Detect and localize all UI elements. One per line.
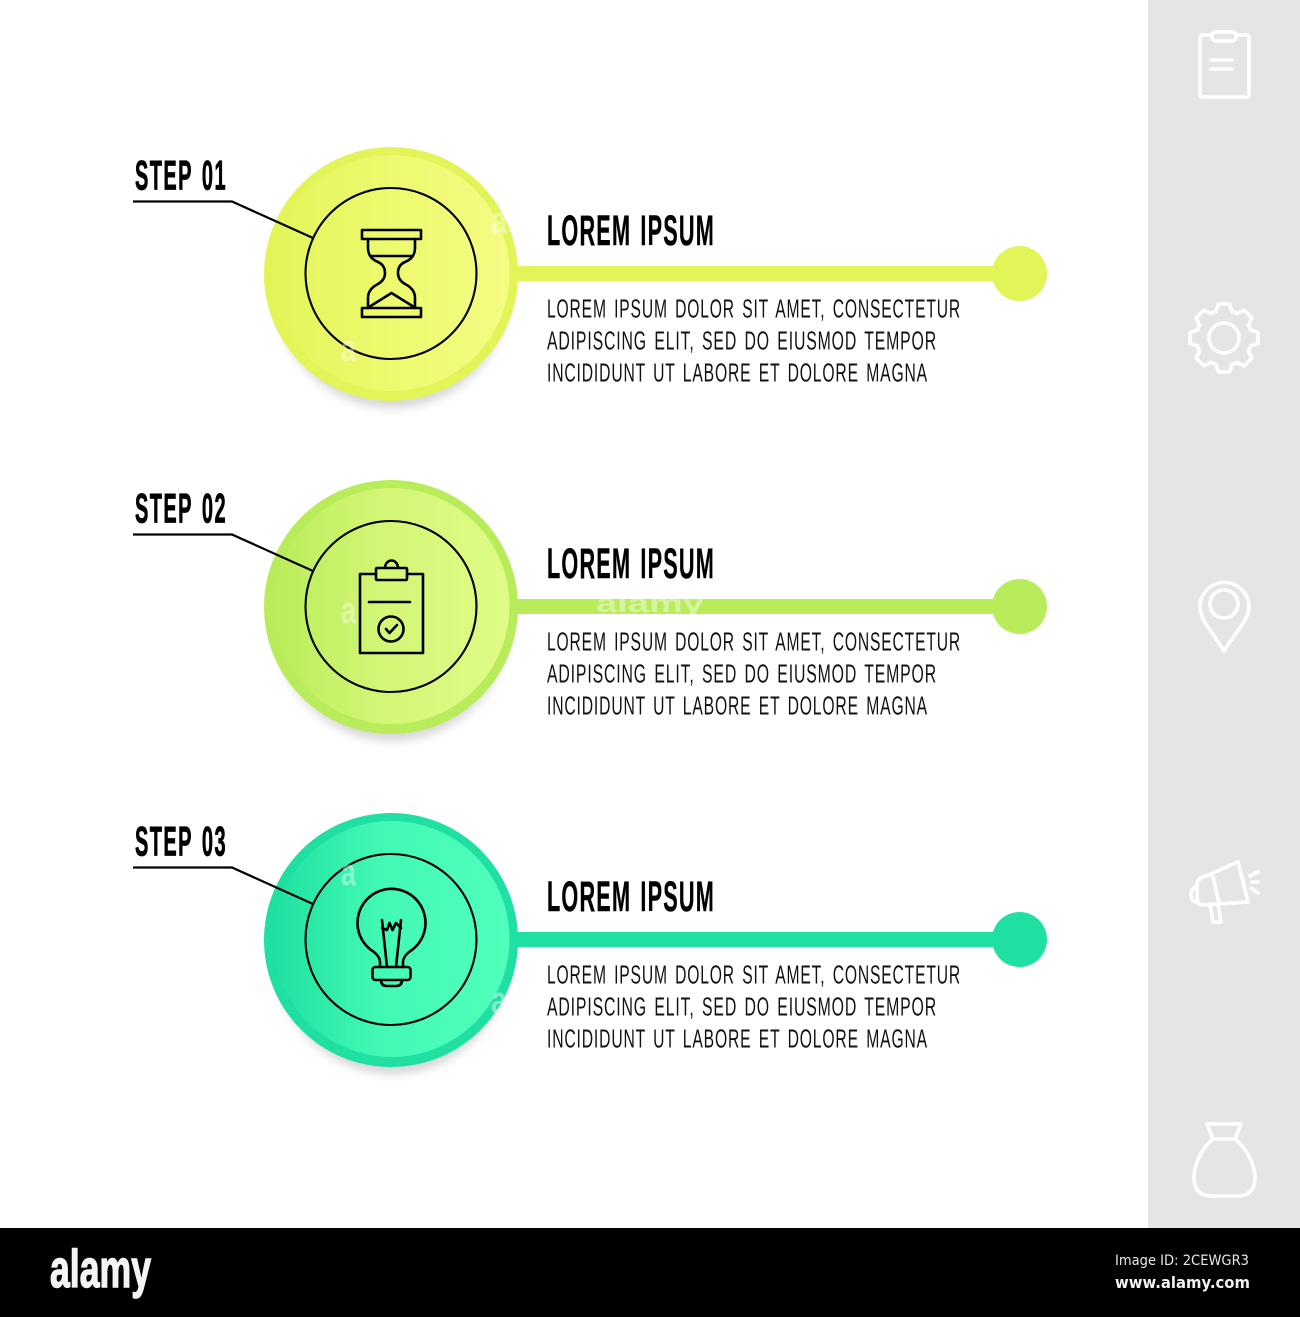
body text: LOREM IPSUM DOLOR SIT AMET, CONSECTETUR: [547, 960, 961, 990]
leader line: [133, 534, 313, 571]
icon: sidebar map pin: [1200, 582, 1249, 651]
panel: step 2: [133, 480, 1047, 741]
icon: sidebar gear: [1190, 304, 1258, 372]
panel: step 1: [133, 147, 1047, 408]
body text: [547, 960, 961, 1054]
body text: LOREM IPSUM DOLOR SIT AMET, CONSECTETUR: [547, 626, 961, 656]
panel: step 2: STEP 02: [135, 484, 227, 532]
heading: LOREM IPSUM: [547, 207, 715, 255]
site url: www.alamy.com: [1115, 1273, 1250, 1292]
body text: ADIPISCING ELIT, SED DO EIUSMOD TEMPOR: [547, 658, 937, 688]
footer bar: [0, 1228, 1300, 1317]
watermark marks: alamy: [596, 588, 705, 618]
body text: LOREM IPSUM DOLOR SIT AMET, CONSECTETUR: [547, 294, 961, 324]
body text: [547, 626, 961, 720]
panel: step 1: STEP 01: [135, 152, 227, 198]
icon: hourglass: [362, 230, 421, 317]
body text: INCIDIDUNT UT LABORE ET DOLORE MAGNA: [547, 690, 928, 720]
body text: INCIDIDUNT UT LABORE ET DOLORE MAGNA: [547, 1024, 928, 1054]
heading: LOREM IPSUM: [547, 873, 715, 921]
leader line: [133, 202, 313, 238]
watermark marks: a: [491, 200, 508, 242]
icon: clipboard with check: [360, 560, 423, 653]
icon: sidebar clipboard: [1200, 32, 1249, 97]
panel: step 3: [133, 813, 1047, 1074]
watermark marks: a: [341, 328, 357, 370]
panel: right sidebar: [1148, 0, 1300, 1228]
watermark marks: a: [341, 852, 357, 894]
body text: [547, 294, 961, 388]
body text: INCIDIDUNT UT LABORE ET DOLORE MAGNA: [547, 358, 928, 388]
watermark marks: [341, 200, 705, 1022]
icon: light bulb: [358, 889, 425, 986]
panel: step 3: STEP 03: [135, 818, 227, 864]
watermark marks: a: [491, 980, 508, 1022]
leader line: [133, 868, 313, 904]
icon: sidebar megaphone: [1191, 862, 1258, 922]
heading: LOREM IPSUM: [547, 540, 715, 588]
image id: Image ID: 2CEWGR3: [1115, 1253, 1249, 1269]
body text: ADIPISCING ELIT, SED DO EIUSMOD TEMPOR: [547, 992, 937, 1022]
body text: ADIPISCING ELIT, SED DO EIUSMOD TEMPOR: [547, 326, 937, 356]
watermark marks: a: [341, 590, 357, 632]
icon: sidebar sack: [1194, 1124, 1255, 1196]
footer logo: alamy: [50, 1240, 151, 1299]
